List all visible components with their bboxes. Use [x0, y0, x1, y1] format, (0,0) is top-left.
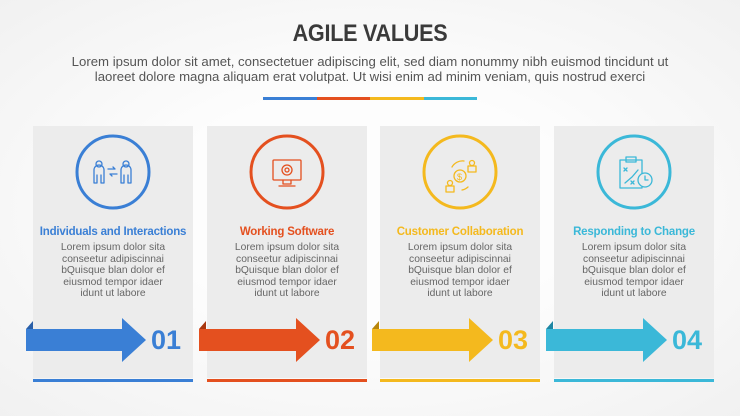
panel: 2: [207, 126, 367, 378]
text block 3: bQuisque blan dolor ef: [408, 265, 512, 276]
icon: customer collaboration: $: [457, 172, 462, 182]
text block 4: bQuisque blan dolor ef: [582, 265, 686, 276]
arrow: 03: [372, 318, 493, 362]
number 02: 02: [325, 325, 355, 355]
heading: Customer Collaboration: Customer Collaboration: [397, 226, 523, 238]
text block 1: eiusmod tempor idaer: [63, 277, 163, 288]
text block 3: conseetur adipiscinnai: [409, 254, 511, 265]
text block 4: idunt ut labore: [601, 288, 667, 299]
heading: Individuals and Interactions: Individuals and Interactions: [40, 226, 186, 238]
arrow: 02: [199, 318, 320, 362]
text block 2: Lorem ipsum dolor sita: [235, 242, 339, 253]
text block 2: [235, 242, 340, 299]
text block 3: idunt ut labore: [427, 288, 493, 299]
bottom line 4: [554, 379, 714, 382]
panel: 4: [554, 126, 714, 378]
panel: 3: [380, 126, 540, 378]
text block 2: bQuisque blan dolor ef: [235, 265, 339, 276]
number 04: 04: [672, 325, 702, 355]
bottom line 1: [33, 379, 193, 382]
text block 1: idunt ut labore: [80, 288, 146, 299]
color divider: [263, 97, 477, 100]
icon: monitor gear: [251, 136, 323, 208]
text block 4: conseetur adipiscinnai: [583, 254, 685, 265]
number 01: 01: [151, 325, 181, 355]
text block 2: idunt ut labore: [254, 288, 320, 299]
text block 3: [408, 242, 512, 299]
bottom line 3: [380, 379, 540, 382]
heading: Responding to Change: Responding to Change: [573, 226, 695, 238]
text block 4: [582, 242, 686, 299]
arrow: 04: [546, 318, 667, 362]
bottom line 2: [207, 379, 367, 382]
title: AGILE VALUES: [293, 20, 447, 47]
text block 4: Lorem ipsum dolor sita: [582, 242, 686, 253]
text block 2: eiusmod tempor idaer: [237, 277, 337, 288]
number 03: 03: [498, 325, 528, 355]
text block 3: eiusmod tempor idaer: [410, 277, 510, 288]
panel: 1: [33, 126, 193, 378]
icon: customer collaboration: [424, 136, 496, 208]
icon: people interactions: [77, 136, 149, 208]
text block 1: [61, 242, 166, 299]
icon: clipboard clock: [598, 136, 670, 208]
text block 1: Lorem ipsum dolor sita: [61, 242, 165, 253]
text block 1: conseetur adipiscinnai: [62, 254, 164, 265]
arrow: 01: [26, 318, 146, 362]
text block 4: eiusmod tempor idaer: [584, 277, 684, 288]
subtitle text: laoreet dolore magna aliquam erat volutpat. Ut wisi enim ad minim veniam, quis nostrud exerci: [95, 69, 645, 84]
text block 3: Lorem ipsum dolor sita: [408, 242, 512, 253]
text block 2: conseetur adipiscinnai: [236, 254, 338, 265]
text block 1: bQuisque blan dolor ef: [61, 265, 165, 276]
subtitle text: [72, 54, 668, 84]
subtitle text: Lorem ipsum dolor sit amet, consectetuer adipiscing elit, sed diam nonummy nibh euismod tincidunt ut: [72, 54, 668, 69]
heading: Working Software: Working Software: [240, 226, 334, 238]
